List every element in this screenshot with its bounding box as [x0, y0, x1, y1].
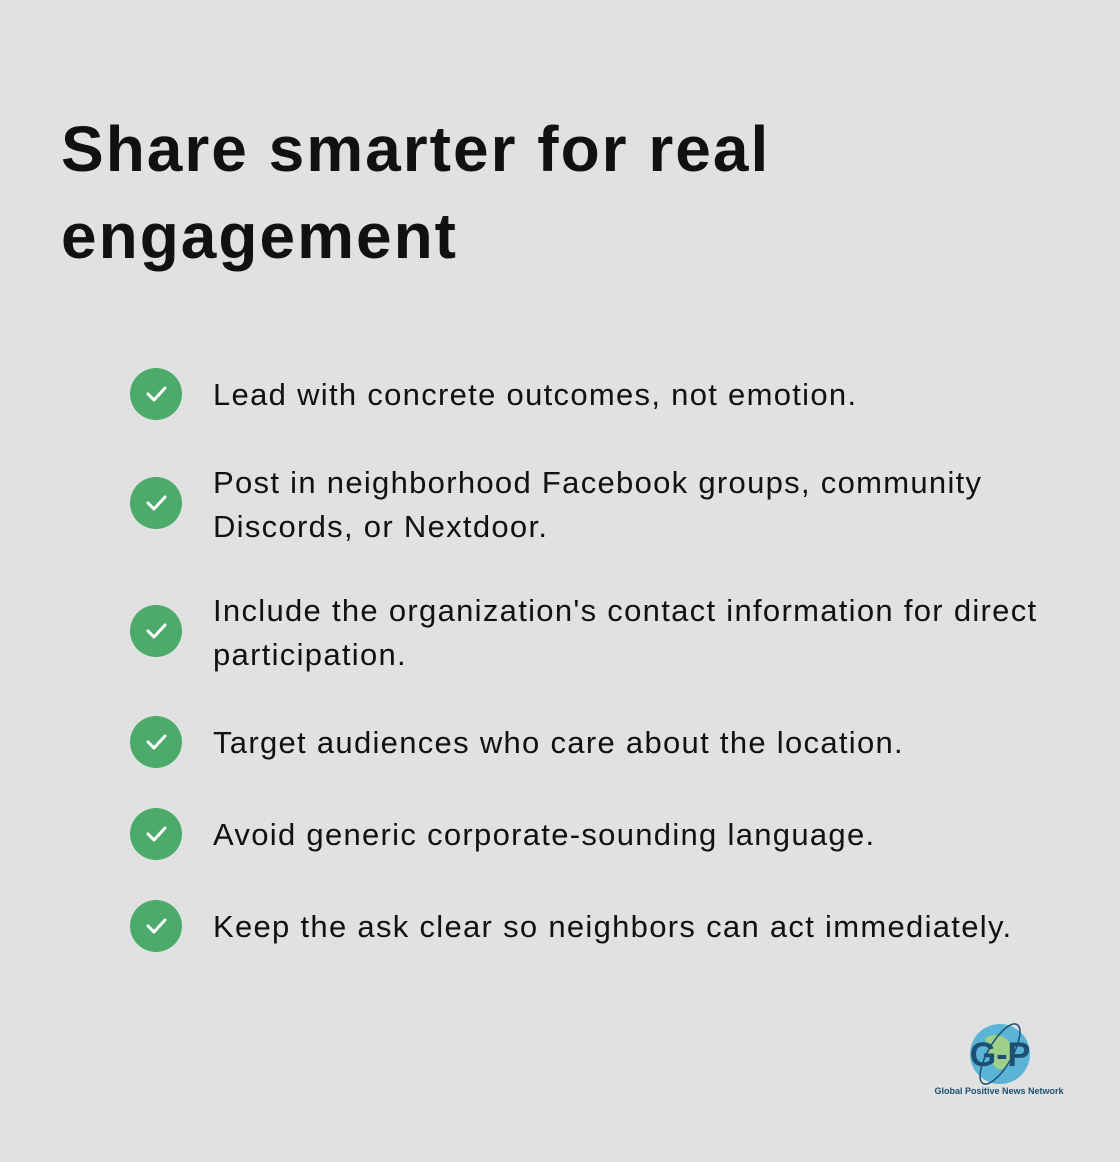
icon: check	[130, 368, 182, 420]
item 5: Avoid generic corporate-sounding language.	[213, 817, 875, 852]
logo: G-P	[970, 1036, 1030, 1074]
item 6	[130, 900, 1012, 952]
item 3: Include the organization's contact information for direct	[213, 593, 1037, 628]
title: Share smarter for real	[61, 113, 770, 185]
logo: Global Positive News Network	[934, 1086, 1065, 1096]
title: engagement	[61, 200, 458, 272]
item 4	[130, 716, 904, 768]
item 6: Keep the ask clear so neighbors can act immediately.	[213, 909, 1012, 944]
logo	[934, 1023, 1065, 1096]
icon: check	[130, 605, 182, 657]
item 4: Target audiences who care about the location.	[213, 725, 904, 760]
item 5	[130, 808, 875, 860]
item 1: Lead with concrete outcomes, not emotion.	[213, 377, 857, 412]
icon: check	[130, 477, 182, 529]
item 3	[130, 593, 1037, 672]
icon: check	[130, 716, 182, 768]
icon: check	[130, 900, 182, 952]
item 2	[130, 465, 982, 544]
title	[61, 113, 770, 272]
item 1	[130, 368, 857, 420]
item 3: participation.	[213, 637, 407, 672]
item 2: Discords, or Nextdoor.	[213, 509, 548, 544]
item 2: Post in neighborhood Facebook groups, community	[213, 465, 982, 500]
icon: check	[130, 808, 182, 860]
